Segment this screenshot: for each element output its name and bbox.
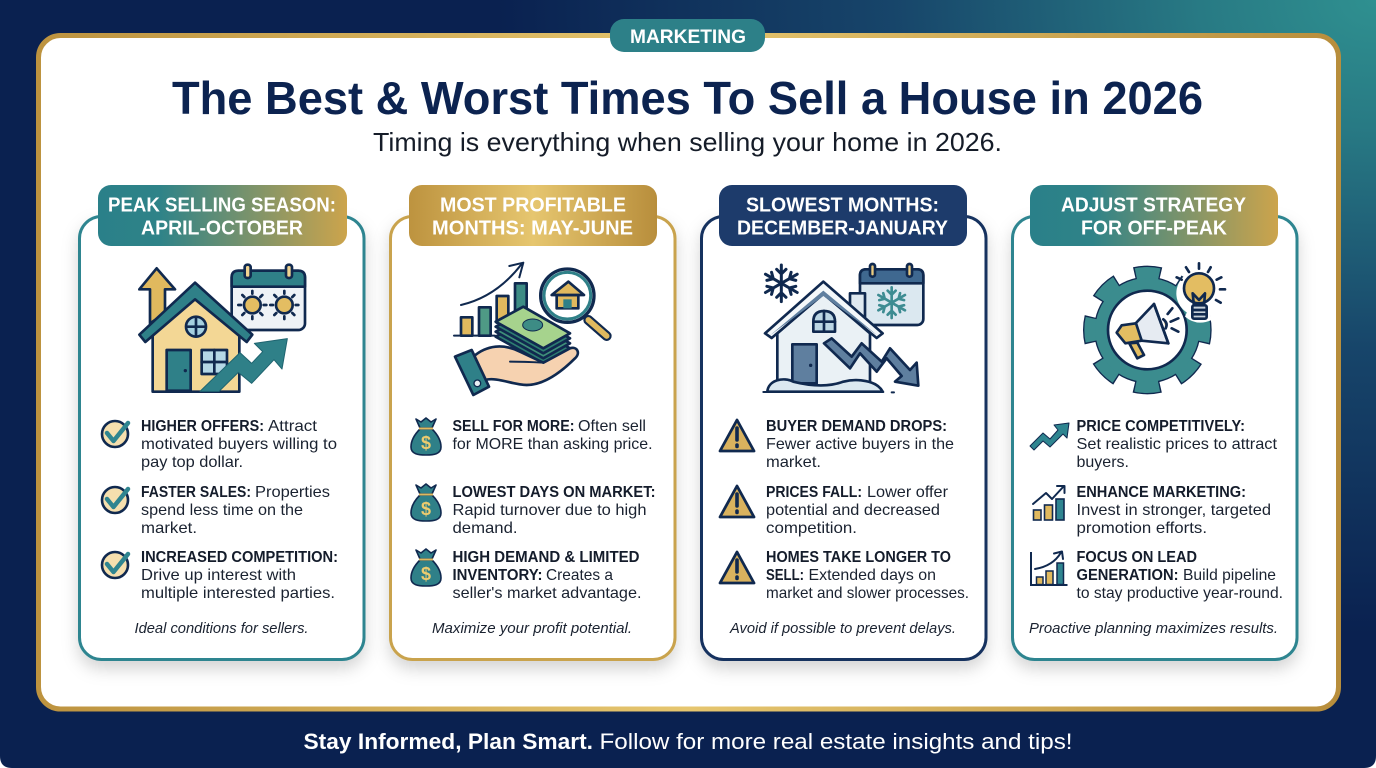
benefit: sell for more: Often sell [578, 418, 646, 435]
benefit: sell for more [411, 418, 652, 455]
subtitle: Timing is everything when selling your home in 2026. [373, 127, 1002, 157]
warning: prices fall [720, 484, 949, 537]
benefit: sell for more: SELL FOR MORE: [452, 418, 574, 435]
benefit: lowest days on market: Rapid turnover due to high [452, 502, 646, 519]
benefit: higher offers: motivated buyers willing to [141, 436, 337, 453]
tip: enhance marketing: Invest in stronger, targeted [1076, 502, 1271, 519]
benefit: faster sales: spend less time on the [141, 502, 303, 519]
tip: enhance marketing: ENHANCE MARKETING: [1076, 484, 1246, 501]
benefit: high demand and limited inventory: $ [421, 564, 431, 584]
benefit: faster sales [102, 484, 330, 537]
benefit: higher offers: HIGHER OFFERS: [141, 418, 264, 435]
footer message: Stay Informed, Plan Smart. [304, 729, 593, 754]
warning: homes take longer to sell: SELL: [766, 567, 804, 584]
tip: price competitively [1030, 418, 1278, 471]
warning: homes take longer to sell: HOMES TAKE LONGER TO [766, 549, 951, 566]
benefit: lowest days on market: $ [421, 499, 431, 519]
tip: focus on lead generation: to stay productive year-round. [1076, 585, 1283, 602]
category pill: marketing [610, 19, 765, 52]
benefit: lowest days on market: demand. [452, 520, 518, 537]
tip: price competitively: PRICE COMPETITIVELY: [1076, 418, 1245, 435]
card heading: APRIL-OCTOBER [141, 218, 304, 240]
panel: peak selling season [80, 185, 364, 660]
warning: buyer demand drops: BUYER DEMAND DROPS: [766, 418, 947, 435]
card note: Avoid if possible to prevent delays. [729, 620, 956, 637]
warning: buyer demand drops [720, 418, 954, 471]
benefit: higher offers: pay top dollar. [141, 454, 243, 471]
card frame [1012, 216, 1297, 660]
tip: price competitively: buyers. [1076, 454, 1129, 471]
panel: adjust strategy for off-peak [1012, 185, 1297, 660]
card frame [390, 216, 675, 660]
card heading [98, 185, 347, 246]
footer message [304, 729, 1072, 754]
benefit: increased competition: INCREASED COMPETITION: [141, 549, 338, 566]
benefit: high demand and limited inventory: HIGH DEMAND & LIMITED [452, 549, 640, 566]
card frame [80, 216, 364, 660]
panel: most profitable months [390, 185, 675, 660]
benefit: high demand and limited inventory: INVENTORY: [452, 567, 542, 584]
benefit: higher offers [102, 418, 337, 471]
tip: focus on lead generation: FOCUS ON LEAD [1076, 549, 1197, 566]
icon: gear with megaphone and light bulb [1091, 263, 1225, 387]
warning: prices fall: Lower offer [867, 484, 949, 501]
benefit: lowest days on market [411, 484, 656, 537]
benefit: high demand and limited inventory: Creates a [546, 567, 613, 584]
title: The Best & Worst Times To Sell a House in 2026 [172, 72, 1203, 124]
warning: prices fall: competition. [766, 520, 857, 537]
card heading: ADJUST STRATEGY [1061, 194, 1247, 216]
benefit: faster sales: market. [141, 520, 197, 537]
card heading: MONTHS: MAY-JUNE [432, 218, 633, 240]
card note: Ideal conditions for sellers. [134, 620, 308, 637]
benefit: higher offers: Attract [268, 418, 318, 435]
card heading: DECEMBER-JANUARY [737, 218, 949, 240]
card note: Proactive planning maximizes results. [1029, 620, 1278, 637]
card note: Maximize your profit potential. [432, 620, 632, 637]
benefit: faster sales: FASTER SALES: [141, 484, 251, 501]
benefit: lowest days on market: LOWEST DAYS ON MARKET: [452, 484, 656, 501]
benefit: sell for more: $ [421, 433, 431, 453]
card heading [1030, 185, 1278, 246]
warning: homes take longer to sell: market and slower processes. [766, 585, 969, 602]
warning: buyer demand drops: market. [766, 454, 821, 471]
warning: homes take longer to sell [720, 549, 969, 602]
tip: focus on lead generation: Build pipeline [1183, 567, 1276, 584]
footer message: Follow for more real estate insights and tips! [600, 729, 1072, 754]
tip: focus on lead generation [1031, 549, 1283, 602]
card frame [702, 216, 986, 660]
card heading: PEAK SELLING SEASON: [108, 194, 336, 216]
warning: prices fall: potential and decreased [766, 502, 940, 519]
warning: homes take longer to sell: Extended days on [808, 567, 936, 584]
icon: house with calendar and rising arrow [139, 265, 305, 392]
panel: slowest months [702, 185, 986, 660]
benefit: increased competition: Drive up interest with [141, 567, 296, 584]
tip: focus on lead generation: GENERATION: [1076, 567, 1178, 584]
benefit: sell for more: for MORE than asking price. [452, 436, 652, 453]
category pill: marketing: MARKETING [630, 27, 746, 48]
icon: hand holding cash with chart and magnifier [454, 263, 607, 395]
card heading: FOR OFF-PEAK [1081, 218, 1228, 240]
icon: snowy house with calendar and falling arrow [763, 264, 923, 392]
benefit: high demand and limited inventory: seller's market advantage. [452, 585, 642, 602]
warning: prices fall: PRICES FALL: [766, 484, 862, 501]
benefit: increased competition: multiple interested parties. [141, 585, 335, 602]
card heading [409, 185, 657, 246]
benefit: high demand and limited inventory [411, 549, 642, 602]
tip: enhance marketing: promotion efforts. [1076, 520, 1207, 537]
warning: buyer demand drops: Fewer active buyers in the [766, 436, 954, 453]
tip: enhance marketing [1033, 484, 1271, 537]
benefit: increased competition [102, 549, 338, 602]
tip: price competitively: Set realistic prices to attract [1076, 436, 1278, 453]
card heading: SLOWEST MONTHS: [746, 194, 939, 216]
card heading [719, 185, 967, 246]
benefit: faster sales: Properties [255, 484, 330, 501]
card heading: MOST PROFITABLE [440, 194, 626, 216]
